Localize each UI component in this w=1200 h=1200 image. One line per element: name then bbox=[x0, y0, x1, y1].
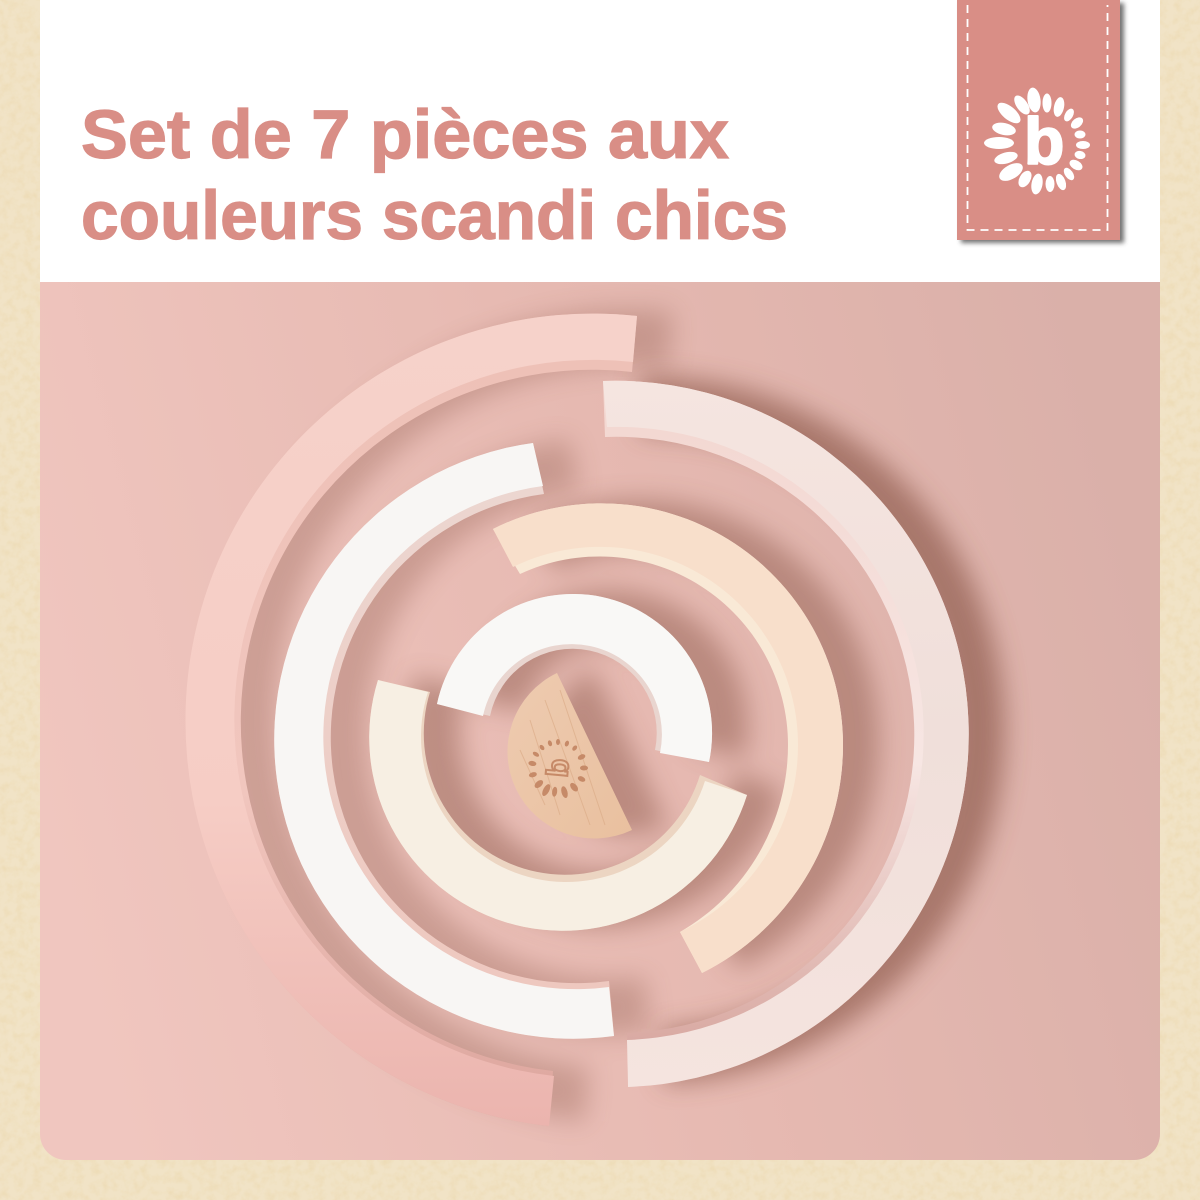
panel: photo background bbox=[40, 282, 1160, 1160]
icon: sunflower logo: b bbox=[1024, 104, 1064, 178]
arc 1: outer pink bbox=[185, 314, 637, 1126]
header band bbox=[40, 0, 1160, 282]
tag with logo bbox=[957, 0, 1124, 243]
icon: engraved logo bbox=[528, 739, 588, 799]
wooden half disc bbox=[508, 673, 632, 838]
arc 6: small white bbox=[437, 594, 712, 762]
cast shadows of the pieces bbox=[221, 310, 1005, 1122]
arc 4: peach bbox=[493, 503, 843, 973]
title: couleurs scandi chics bbox=[81, 177, 788, 254]
icon: engraved logo: b bbox=[541, 757, 576, 778]
arc 5: cream bbox=[369, 680, 747, 931]
arc 3: white bbox=[274, 443, 614, 1039]
arc 2: pale pink bbox=[603, 381, 969, 1087]
title bbox=[81, 96, 788, 254]
title: Set de 7 pièces aux bbox=[81, 96, 729, 173]
icon: sunflower logo bbox=[984, 87, 1090, 195]
